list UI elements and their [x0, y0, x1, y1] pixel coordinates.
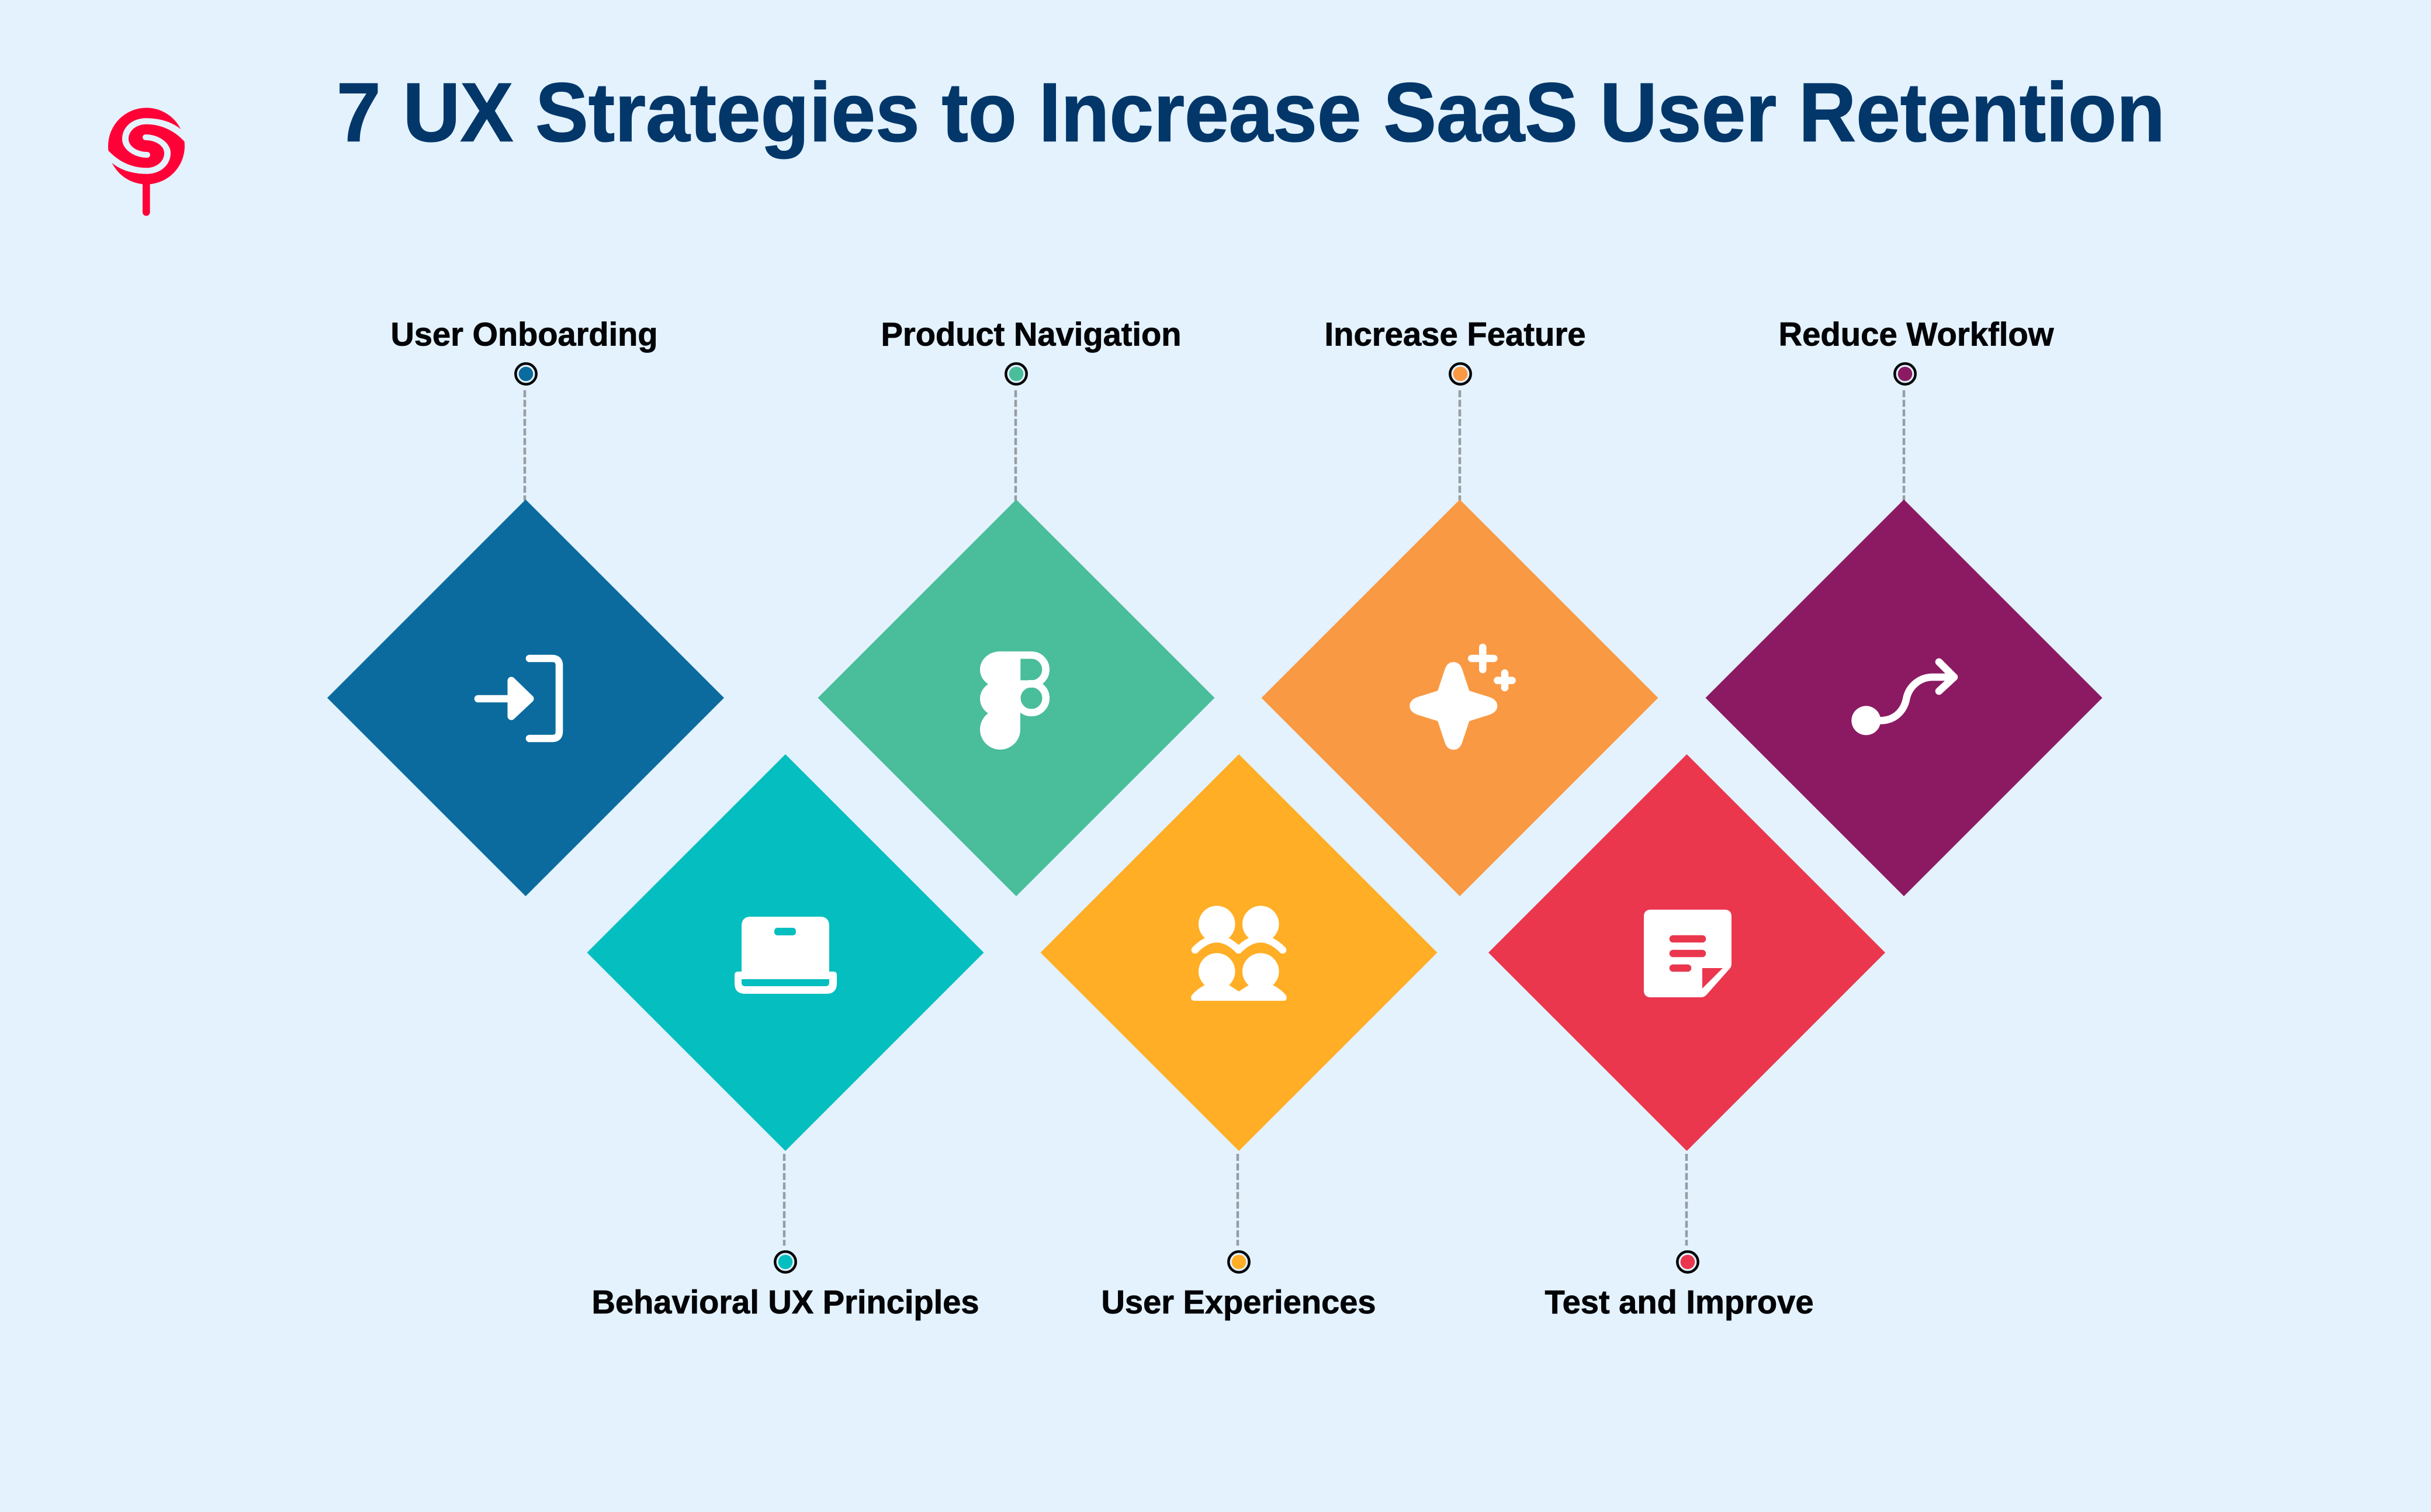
strategy: Behavioral UX Principles — [587, 754, 984, 1321]
marker dot: User Onboarding — [515, 363, 536, 384]
strategy: Product Navigation — [818, 315, 1214, 896]
strategy: Reduce Workflow — [1705, 315, 2103, 896]
diamond: Behavioral UX Principles — [587, 754, 984, 1151]
icon: route arrow — [1851, 662, 1954, 735]
marker dot: Behavioral UX Principles — [775, 1251, 796, 1272]
connector: Product Navigation — [1014, 390, 1017, 501]
icon: sparkle — [1410, 647, 1512, 750]
label: User Onboarding: User Onboarding — [390, 315, 658, 353]
connector: User Onboarding — [524, 390, 526, 501]
marker dot: Reduce Workflow — [1895, 363, 1916, 384]
marker dot: Increase Feature — [1450, 363, 1471, 384]
icon: people group — [1191, 906, 1287, 1001]
connector: Reduce Workflow — [1903, 390, 1905, 501]
label: Behavioral UX Principles: Behavioral UX Principles — [591, 1284, 979, 1321]
title: 7 UX Strategies to Increase SaaS User Retention — [337, 67, 2165, 159]
strategy: Increase Feature — [1261, 315, 1658, 896]
diamond: User Onboarding — [327, 500, 724, 896]
icon: laptop — [735, 917, 837, 994]
connector: Behavioral UX Principles — [783, 1154, 785, 1246]
marker dot: Product Navigation — [1006, 363, 1027, 384]
label: Increase Feature: Increase Feature — [1324, 315, 1586, 353]
diamond: Reduce Workflow — [1705, 500, 2103, 896]
label: Product Navigation: Product Navigation — [881, 315, 1182, 353]
logo: red lollipop swirl — [106, 107, 187, 216]
connector: Increase Feature — [1459, 390, 1461, 501]
connector: Test and Improve — [1685, 1154, 1688, 1246]
label: Reduce Workflow: Reduce Workflow — [1779, 315, 2054, 353]
icon: login arrow — [478, 658, 559, 738]
label: Test and Improve: Test and Improve — [1545, 1284, 1814, 1321]
diamond: Increase Feature — [1261, 500, 1658, 896]
strategy: Test and Improve — [1488, 754, 1885, 1321]
marker dot: User Experiences — [1228, 1251, 1249, 1272]
diamond: Test and Improve — [1488, 754, 1885, 1151]
marker dot: Test and Improve — [1677, 1251, 1698, 1272]
connector: User Experiences — [1237, 1154, 1239, 1246]
strategy: User Onboarding — [327, 315, 724, 896]
label: User Experiences: User Experiences — [1101, 1284, 1376, 1321]
icon: figma logo — [980, 651, 1046, 750]
diamond: User Experiences — [1040, 754, 1438, 1151]
diamond: Product Navigation — [818, 500, 1214, 896]
strategy: User Experiences — [1040, 754, 1438, 1321]
icon: note document — [1644, 910, 1732, 997]
